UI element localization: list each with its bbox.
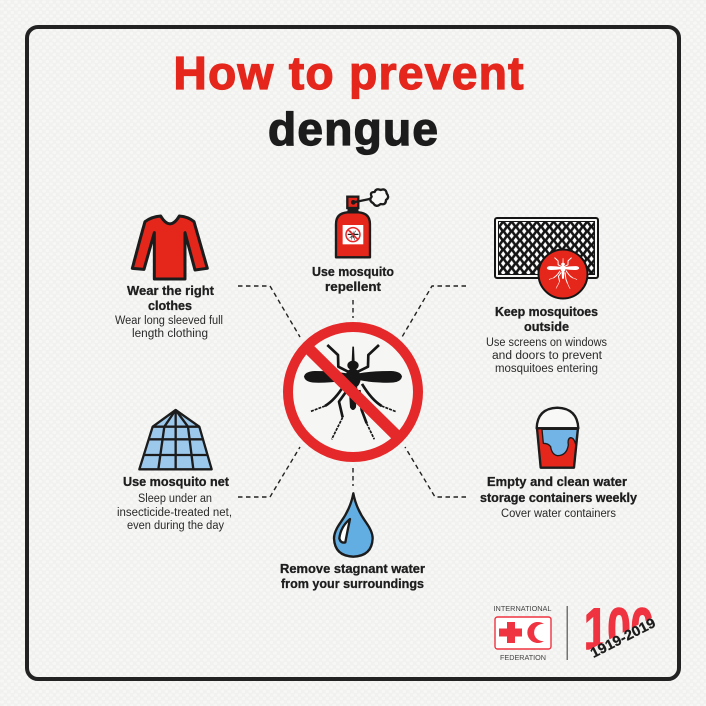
panel: keep mosquitoes outside: outside — [524, 319, 569, 334]
connector lines — [238, 286, 466, 497]
panel: empty and clean water containers: storage containers weekly — [480, 490, 638, 505]
logo: 100 years: 100 — [584, 597, 654, 662]
prohibition sign — [288, 327, 418, 457]
panel: wear the right clothes: clothes — [148, 298, 192, 313]
panel: wear the right clothes: length clothing — [132, 328, 208, 340]
description: Wear long sleeved full — [115, 315, 223, 327]
icon: bucket — [537, 408, 578, 468]
icon: bed net — [139, 410, 212, 469]
heading: Keep mosquitoes — [495, 304, 598, 319]
panel: keep mosquitoes outside: mosquitoes entering — [495, 363, 598, 375]
title: dengue — [268, 103, 438, 155]
description: Cover water containers — [501, 508, 616, 520]
heading: Remove stagnant water — [280, 561, 425, 576]
heading: Wear the right — [127, 283, 215, 298]
panel: use mosquito repellent: repellent — [325, 279, 382, 294]
icon: shirt — [132, 216, 207, 279]
description: Use screens on windows — [486, 337, 607, 349]
logo: 100 years: 1919-2019 — [587, 614, 658, 661]
panel: use mosquito repellent — [312, 189, 394, 294]
icon: window screen — [495, 218, 598, 298]
panel: keep mosquitoes outside — [486, 218, 607, 375]
heading: Use mosquito net — [123, 474, 230, 489]
icon: water drop — [334, 493, 373, 557]
panel: use mosquito net: insecticide-treated net, — [117, 507, 232, 519]
title — [174, 47, 524, 155]
description: Sleep under an — [138, 493, 212, 505]
panel: remove stagnant water: from your surroundings — [281, 576, 424, 591]
panel: empty and clean water containers — [480, 408, 638, 520]
panel: remove stagnant water — [280, 493, 425, 591]
white disc — [291, 330, 415, 454]
emblem — [495, 617, 551, 649]
logo: IFRC: INTERNATIONAL — [494, 604, 552, 613]
panel: use mosquito net: even during the day — [127, 520, 224, 532]
heading: Empty and clean water — [487, 474, 627, 489]
panel: use mosquito net — [117, 410, 232, 532]
icon: spray can — [336, 189, 388, 257]
title: How to prevent — [174, 47, 524, 99]
central no-mosquito icon — [288, 327, 418, 457]
heading: Use mosquito — [312, 264, 394, 279]
panel: keep mosquitoes outside: and doors to prevent — [492, 350, 603, 362]
panel: wear the right clothes — [115, 216, 223, 340]
logo: IFRC — [494, 604, 552, 662]
logo: IFRC: FEDERATION — [500, 653, 546, 662]
mosquito — [304, 345, 402, 439]
logo divider — [567, 606, 568, 660]
